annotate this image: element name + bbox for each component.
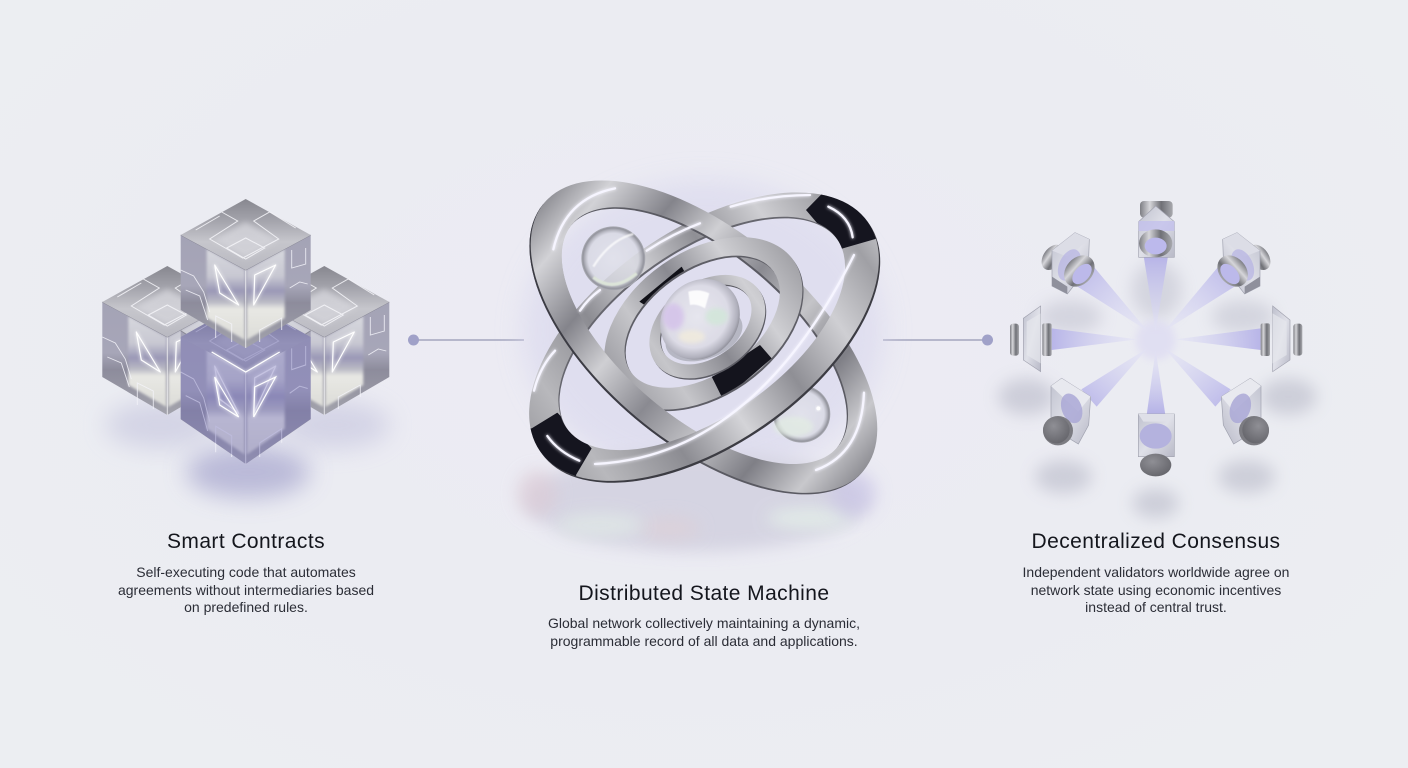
text block: smart contracts xyxy=(118,530,374,615)
validator: left xyxy=(1010,306,1137,372)
ring B front half xyxy=(542,224,880,483)
neon light strips xyxy=(534,188,864,470)
validator: upper left xyxy=(1037,233,1147,331)
description: decentralized consensus: instead of central trust. xyxy=(1085,599,1227,615)
text block: distributed state machine xyxy=(548,582,860,649)
description: smart contracts xyxy=(118,564,374,615)
centre glow xyxy=(1136,320,1176,360)
validator: lower left xyxy=(1043,348,1147,445)
heading: distributed state machine: Distributed State Machine xyxy=(579,582,829,605)
black segment C2 xyxy=(712,345,772,396)
description: distributed state machine xyxy=(548,615,860,649)
cube shadows xyxy=(105,401,390,498)
description: smart contracts: on predefined rules. xyxy=(184,599,308,615)
description: decentralized consensus: Independent validators worldwide agree on xyxy=(1023,564,1289,580)
description: distributed state machine: programmable record of all data and applications. xyxy=(550,633,858,649)
black segment lower left xyxy=(530,412,592,476)
glass sphere lower right xyxy=(773,385,830,443)
heading: decentralized consensus: Decentralized Consensus xyxy=(1032,530,1280,553)
black segment top right xyxy=(806,194,876,249)
illustration: decentralized consensus validators xyxy=(998,201,1317,518)
ring A front overlap xyxy=(529,202,696,442)
heading: smart contracts: Smart Contracts xyxy=(167,530,325,553)
validator: upper right xyxy=(1165,233,1275,331)
cube: front purple xyxy=(181,301,311,464)
description: smart contracts: agreements without intermediaries based xyxy=(118,582,374,598)
ring B back half xyxy=(529,192,869,453)
description: decentralized consensus: network state using economic incentives xyxy=(1031,582,1281,598)
ring A xyxy=(476,122,931,553)
illustration: smart contract cubes xyxy=(102,199,390,498)
ring C xyxy=(604,237,804,412)
halo xyxy=(523,180,883,480)
validator: right xyxy=(1175,306,1302,372)
validator: lower right xyxy=(1165,348,1269,445)
validator: bottom xyxy=(1138,350,1174,476)
illustration: distributed state machine rings xyxy=(514,180,889,556)
description: decentralized consensus xyxy=(1023,564,1289,615)
iridescent floor reflection xyxy=(517,452,877,552)
text block: decentralized consensus xyxy=(1023,530,1289,615)
glass sphere upper left xyxy=(581,226,645,290)
description: smart contracts: Self-executing code that automates xyxy=(136,564,356,580)
black segment C1 xyxy=(640,266,684,304)
ground shadows xyxy=(998,262,1317,518)
cube: right xyxy=(259,266,389,415)
description: distributed state machine: Global network collectively maintaining a dynamic, xyxy=(548,615,860,631)
ring D xyxy=(630,253,786,401)
central glass sphere xyxy=(644,263,756,376)
validator: top xyxy=(1139,201,1174,332)
cube: left xyxy=(102,266,232,415)
cube: top xyxy=(181,199,311,348)
connector: right xyxy=(883,334,993,346)
connector: left xyxy=(408,334,524,346)
